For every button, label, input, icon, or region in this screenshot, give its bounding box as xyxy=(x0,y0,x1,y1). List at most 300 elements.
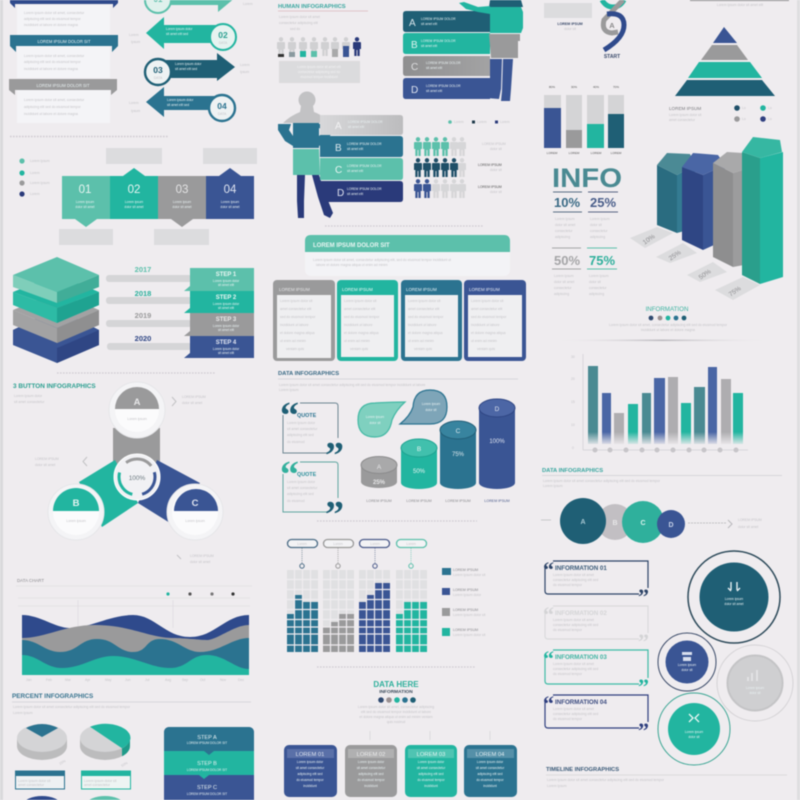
ribbon 1: adipiscing elit sed do eiusmod tempor xyxy=(24,17,82,21)
bar labels: LOREM xyxy=(547,151,558,155)
quote box 1: Lorem ipsum dolor xyxy=(287,421,316,425)
card C xyxy=(320,158,403,180)
axis labels: Mar xyxy=(65,678,72,682)
description xyxy=(358,705,434,724)
quote box 2: do eiusmod xyxy=(287,499,305,503)
chart legend: LOREM IPSUM xyxy=(453,608,478,612)
bar labels: 70% xyxy=(613,85,619,89)
card dark teal: et dolore magna aliqua xyxy=(408,331,443,335)
arrow 03: 03 xyxy=(153,65,163,75)
button captions: LOREM IPSUM xyxy=(190,554,214,558)
speech drop 2: dolor sit xyxy=(425,408,437,412)
heading: DATA INFOGRAPHICS xyxy=(542,468,603,474)
step 4: STEP 4 xyxy=(216,340,237,346)
quote box 2: ” xyxy=(325,494,344,536)
wave layers xyxy=(22,615,249,675)
panel: timeline infographics xyxy=(546,767,787,788)
step 02: 02 xyxy=(128,184,140,196)
card D: LOREM IPSUM DOLOR xyxy=(426,84,461,88)
card D: sit amet elit xyxy=(426,89,442,93)
stat 75%: dolor sit xyxy=(589,280,601,284)
stat 25%: Lorem ipsum xyxy=(590,217,610,221)
step 01 xyxy=(62,176,110,227)
card blue xyxy=(464,280,526,361)
card C: C xyxy=(411,62,418,73)
card blue: et dolore magna aliqua xyxy=(471,331,506,335)
information 03: consectetur adipiscing elit sed xyxy=(553,667,598,671)
ribbon 3: incididunt ut labore et dolore magna xyxy=(24,112,78,116)
circle blue: dolor sit xyxy=(681,668,693,672)
panel: info percentages xyxy=(552,163,622,296)
axis labels: Jul xyxy=(145,678,150,682)
step stack: LOREM IPSUM DOLOR SIT xyxy=(187,792,227,796)
step 02: dolor sit amet xyxy=(124,205,144,209)
axis labels: 15 xyxy=(571,400,575,404)
label box 2 xyxy=(81,771,131,789)
step 04: 04 xyxy=(224,184,237,196)
information 01: Lorem ipsum dolor sit amet xyxy=(553,573,594,577)
panel: data infographics quotes and cylinders xyxy=(278,371,518,536)
circle gray: Lorem ipsum xyxy=(746,686,765,690)
panel: stacked percent bars xyxy=(544,85,624,155)
figure: woman hands on hips xyxy=(278,92,334,218)
arrow 04: 04 xyxy=(217,101,227,111)
axis labels: 0 xyxy=(572,446,574,450)
stat 25%: adipiscing xyxy=(590,235,605,239)
card blue: ut enim ad minim xyxy=(471,339,497,343)
info label xyxy=(609,306,728,332)
information 02: do eiusmod tempor xyxy=(553,628,583,632)
step 01: Lorem ipsum xyxy=(76,200,95,204)
cylinder A: A xyxy=(377,464,382,471)
card gray: amet consectetur elit xyxy=(280,307,311,311)
info label: incididunt ut labore et dolore magna xyxy=(641,328,695,332)
pills: Lorem xyxy=(333,542,343,546)
card gray: veniam quis xyxy=(286,347,304,351)
quote box 2: “ xyxy=(280,454,299,496)
card A: A xyxy=(335,121,342,132)
arrow 02: Lorem ipsum dolor xyxy=(166,27,193,31)
step 4: Lorem ipsum dolor xyxy=(213,347,240,351)
card gray: ut enim ad minim xyxy=(280,339,306,343)
ribbon 1 xyxy=(10,0,118,38)
bar labels xyxy=(547,85,622,155)
stat 75%: 75% xyxy=(589,253,615,268)
card blue: sed do eiusmod tempor xyxy=(471,315,507,319)
heading: Lorem ipsum dolor xyxy=(14,394,43,398)
quote box 1: QUOTE xyxy=(297,413,317,419)
quote box 2: sit amet consectetur xyxy=(287,486,318,490)
button captions: dolor sit amet xyxy=(35,463,55,467)
pills xyxy=(288,540,426,548)
panel: 3d hexagonal bars: 10% xyxy=(642,233,657,246)
arrow 03: sit amet elit sed xyxy=(175,67,197,71)
overlap circles: LOREM IPSUM xyxy=(738,518,762,522)
bar labels: 80% xyxy=(549,85,555,89)
ribbon 2: adipiscing elit sed do eiusmod tempor xyxy=(24,60,82,64)
card teal: incididunt ut labore xyxy=(344,323,373,327)
stat 10%: dolor sit amet xyxy=(555,223,575,227)
step 1: Lorem ipsum dolor xyxy=(213,279,240,283)
ribbon 2: LOREM IPSUM DOLOR SIT xyxy=(37,39,91,44)
step stack: STEP A xyxy=(197,735,217,741)
card 04: Lorem ipsum dolor xyxy=(477,760,504,764)
cylinder B xyxy=(401,439,437,489)
step 4 xyxy=(184,336,254,358)
quote box 2: QUOTE xyxy=(297,472,317,478)
stat 50% xyxy=(552,248,581,296)
information 01: ” xyxy=(638,584,649,609)
bar labels: 40% xyxy=(593,85,599,89)
card A xyxy=(403,11,490,32)
card D xyxy=(320,181,403,202)
floor labels xyxy=(630,227,760,300)
step 02 xyxy=(110,168,158,219)
year labels: 2018 xyxy=(135,289,151,298)
card D: D xyxy=(337,188,344,199)
figure: woman pointing xyxy=(459,0,523,101)
dots xyxy=(378,697,416,703)
panel: human infographics xyxy=(277,0,523,218)
stat 50%: dolor sit amet xyxy=(554,280,574,284)
step 1: STEP 1 xyxy=(216,272,237,278)
label box 2: amet consectetur xyxy=(84,783,111,787)
overlap circles: dolor sit amet xyxy=(738,525,758,529)
button captions xyxy=(35,395,214,564)
overlap circles xyxy=(541,498,762,544)
card teal: et dolore magna aliqua xyxy=(344,331,379,335)
quote box 1: adipiscing elit sed xyxy=(287,433,314,437)
panel: ribbon text cards xyxy=(9,0,118,123)
heading: Lorem ipsum xyxy=(279,388,299,392)
timeline legend: Lorem ipsum xyxy=(30,181,50,185)
card 03 xyxy=(405,745,457,797)
information 04: Lorem ipsum dolor sit amet xyxy=(553,707,594,711)
card 03: LOREM 03 xyxy=(417,752,445,758)
step 4: sit amet elit xyxy=(218,351,234,355)
bar 10 xyxy=(657,153,695,233)
year bars xyxy=(106,275,192,350)
heading: 3 BUTTON INFOGRAPHICS xyxy=(13,383,96,390)
timeline legend xyxy=(19,158,50,197)
axis labels: May xyxy=(105,678,112,682)
arrow 03: DATA xyxy=(154,76,163,80)
bar tracks xyxy=(544,95,624,148)
card dark teal: amet consectetur elit xyxy=(408,307,439,311)
heading xyxy=(278,371,518,392)
information 01 xyxy=(543,557,649,609)
card 03: do eiusmod tempor xyxy=(417,778,446,782)
letter A and start label: START xyxy=(604,54,620,60)
circle teal: Lorem ipsum xyxy=(685,730,704,734)
pyramid legend: Lo xyxy=(768,106,772,110)
card 02: LOREM 02 xyxy=(357,752,385,758)
card C: sit amet elit xyxy=(426,66,442,70)
information 02: consectetur adipiscing elit sed xyxy=(553,623,598,627)
stat 25% xyxy=(588,192,618,239)
panel: 3 button infographics xyxy=(13,382,223,564)
button captions: LOREM IPSUM xyxy=(35,457,59,461)
chart legend: Lorem ipsum dolor sit xyxy=(453,573,485,577)
circle gray xyxy=(717,645,793,721)
step 03: Lorem ipsum xyxy=(173,200,192,204)
card 01: sit amet consectetur xyxy=(296,766,325,770)
pills: Lorem xyxy=(406,542,416,546)
information 03: INFORMATION 03 xyxy=(555,654,607,661)
cylinder C: C xyxy=(456,428,461,435)
card teal: veniam quis xyxy=(350,347,368,351)
gray caption box xyxy=(544,3,592,18)
heading xyxy=(542,468,782,488)
card 04: do eiusmod tempor xyxy=(476,778,505,782)
step stack: LOREM IPSUM DOLOR SIT xyxy=(187,741,227,745)
arrow 03: Ipsum xyxy=(240,70,249,74)
card B: B xyxy=(411,40,418,51)
heading: consectetur adipiscing elit xyxy=(279,21,318,25)
card blue: veniam quis xyxy=(477,347,495,351)
chart legend: Lorem ipsum dolor sit xyxy=(453,613,485,617)
arrow 03: Lorem xyxy=(240,63,250,67)
arrow 02: Ipsum xyxy=(131,40,140,44)
step 3: Lorem ipsum dolor xyxy=(213,324,240,328)
pills: Lorem xyxy=(297,542,307,546)
step 3: sit amet elit xyxy=(218,328,234,332)
pills: Lorem xyxy=(370,542,380,546)
card 04: adipiscing elit sed xyxy=(477,772,503,776)
information 04: do eiusmod tempor xyxy=(553,717,583,721)
cylinder D: 100% xyxy=(489,439,505,445)
timeline legend: Lorem xyxy=(30,171,40,175)
speech drop 1: Lorem ipsum xyxy=(366,415,385,419)
button B: B xyxy=(73,498,80,509)
layer mint xyxy=(13,257,99,303)
panel: pyramid xyxy=(669,0,789,122)
axis labels xyxy=(571,355,575,450)
arrow 02: Lorem xyxy=(129,33,139,37)
cylinder labels: LOREM IPSUM xyxy=(484,499,510,503)
card 04 xyxy=(464,745,517,797)
panel: percent infographics xyxy=(12,693,254,800)
panel: 3d hexagonal bars: 75% xyxy=(728,285,743,298)
label box 1 xyxy=(15,771,65,789)
gray text box: eiusmod tempor incididunt xyxy=(300,75,338,79)
arrow 04 xyxy=(129,87,235,121)
card A: sit amet elit xyxy=(421,22,437,26)
speech drop 2 xyxy=(400,390,447,424)
axis labels: Jan xyxy=(26,678,32,682)
title: DATA HERE xyxy=(373,680,419,689)
panel: data here xyxy=(284,680,517,797)
panel: waffle column chart xyxy=(287,540,485,652)
button A: Lorem ipsum xyxy=(127,417,147,421)
description: quis nostrud xyxy=(387,720,405,724)
speech drop 1 xyxy=(358,402,405,437)
card teal: Lorem ipsum dolor sit xyxy=(344,299,376,303)
caption: LOREM IPSUM xyxy=(557,22,583,26)
panel: timeline infographics: TIMELINE INFOGRAPHICS xyxy=(546,767,619,773)
people pictogram chart: Lorem xyxy=(500,120,510,124)
stat 10%: adipiscing xyxy=(555,235,570,239)
step stack: LOREM IPSUM DOLOR SIT xyxy=(187,768,227,772)
step 3 xyxy=(184,313,254,336)
stat 25%: dolor sit xyxy=(590,223,602,227)
quote box 2: adipiscing elit sed xyxy=(287,492,314,496)
column group 3 xyxy=(359,570,390,652)
chart heading: DATA CHART xyxy=(17,578,44,583)
axis labels: Feb xyxy=(46,678,52,682)
cylinder D: D xyxy=(495,406,500,413)
arrow 03: Lorem ipsum dolor xyxy=(175,62,202,66)
step 3: STEP 3 xyxy=(216,317,237,323)
arrow 04: Lorem ipsum dolor xyxy=(167,98,194,102)
information 04: “ xyxy=(543,691,554,716)
ribbon 2 xyxy=(10,35,118,78)
ribbon 1: incididunt ut labore et dolore magna xyxy=(24,23,78,27)
card dark teal xyxy=(401,280,462,361)
step 04 xyxy=(206,168,254,219)
panel: 3d hexagonal bars: 25% xyxy=(668,249,683,262)
panel: layered cube with years xyxy=(13,257,254,363)
button captions: dolor sit amet xyxy=(182,401,202,405)
axis labels: 10 xyxy=(571,423,575,427)
circle blue xyxy=(658,633,716,691)
panel: lorem ipsum color set: Lorem ipsum dolor sit amet, consectetur adipiscing elit, sed do eiusmod tempor incididunt ut xyxy=(313,258,451,262)
stat 75%: Lorem ipsum xyxy=(589,274,609,278)
panel: data infographics circles xyxy=(541,468,782,544)
card dark teal: Lorem ipsum dolor sit xyxy=(408,299,440,303)
description: Lorem ipsum dolor sit amet, consectetur adipiscing xyxy=(358,705,434,709)
cylinder D xyxy=(479,399,515,489)
cylinder C: 75% xyxy=(452,452,465,458)
pyramid legend: Lo xyxy=(742,106,746,110)
pyramid legend: Lo xyxy=(742,117,746,121)
caption: dolor sit xyxy=(564,27,576,31)
information 04: consectetur adipiscing elit sed xyxy=(553,712,598,716)
cylinder labels: LOREM IPSUM xyxy=(406,499,432,503)
speech drop 2: Lorem ipsum xyxy=(422,402,441,406)
step 1: sit amet elit xyxy=(218,283,234,287)
card D: D xyxy=(411,85,418,96)
pie 1 xyxy=(17,724,67,766)
information 01: consectetur adipiscing elit sed xyxy=(553,578,598,582)
card 04: incididunt xyxy=(483,784,497,788)
year labels: 2017 xyxy=(135,265,151,274)
button captions: LOREM IPSUM xyxy=(182,395,206,399)
card C: sit amet elit xyxy=(347,169,363,173)
ribbon 1: Lorem ipsum dolor sit amet, consectetur xyxy=(24,11,85,15)
title: INFORMATION xyxy=(379,689,413,695)
ribbon 3: LOREM IPSUM DOLOR SIT xyxy=(36,83,90,88)
stat 50%: 50% xyxy=(554,253,580,268)
card A: LOREM IPSUM DOLOR xyxy=(348,120,383,124)
axis labels: Sep xyxy=(182,678,188,682)
card 02: adipiscing elit sed xyxy=(358,772,384,776)
bar 25 xyxy=(682,153,725,250)
step 2 xyxy=(184,291,254,313)
chart legend: Lorem ipsum dolor sit xyxy=(453,633,485,637)
card C xyxy=(403,56,490,76)
card gray xyxy=(273,280,335,361)
heading: Lorem ipsum dolor sit amet consectetur adipiscing elit sed do eiusmod tempor xyxy=(543,479,661,483)
information 03: “ xyxy=(543,646,554,671)
card A xyxy=(320,115,403,135)
card gray: Lorem ipsum dolor sit xyxy=(280,299,312,303)
cylinder B: B xyxy=(417,446,421,453)
circle gray: dolor sit xyxy=(749,691,761,695)
info label: INFORMATION xyxy=(646,306,688,313)
stat 75%: adipiscing xyxy=(589,292,604,296)
ribbon 3: adipiscing elit sed do eiusmod tempor xyxy=(24,105,82,109)
people pictogram chart: Lorem xyxy=(454,120,464,124)
arrow 03 xyxy=(145,53,250,85)
axis labels: Apr xyxy=(85,678,91,682)
card gray: LOREM IPSUM xyxy=(279,287,310,292)
circle large teal xyxy=(688,551,780,643)
gray text box: Lorem ipsum dolor sit amet elit xyxy=(297,65,341,69)
bar fills xyxy=(544,108,624,148)
blue arm xyxy=(138,460,200,523)
heading: HUMAN INFOGRAPHICS xyxy=(278,4,346,10)
circle teal xyxy=(658,693,730,765)
step 2: Lorem ipsum dolor xyxy=(213,302,240,306)
arrow 04: DATA xyxy=(218,112,227,116)
card 01: LOREM 01 xyxy=(296,752,324,758)
ribbon 2: incididunt ut labore et dolore magna xyxy=(24,67,78,71)
information 03: do eiusmod tempor xyxy=(553,672,583,676)
axis labels: Nov xyxy=(220,678,226,682)
card B: B xyxy=(335,143,342,154)
quote box 1: ” xyxy=(325,435,344,477)
timeline legend: Lorem xyxy=(30,192,40,196)
information 02: INFORMATION 02 xyxy=(555,610,607,617)
card gray: incididunt ut labore xyxy=(280,323,309,327)
step 02: Lorem ipsum xyxy=(125,200,144,204)
cylinder A xyxy=(361,456,397,488)
gray text box xyxy=(279,61,360,83)
year labels: 2019 xyxy=(135,311,151,320)
people pictogram chart: LOREM IPSUM xyxy=(482,142,506,146)
teal arm xyxy=(79,460,138,527)
bar 50 xyxy=(713,152,760,267)
timeline legend: Lorem ipsum xyxy=(30,159,50,163)
card 02: Lorem ipsum dolor xyxy=(358,760,385,764)
axis labels: Oct xyxy=(200,678,205,682)
arrow 02: 02 xyxy=(218,30,228,40)
panel: lorem ipsum color set: labore et dolore magna aliqua ut enim ad minim xyxy=(316,263,388,267)
step 1 xyxy=(184,268,254,291)
bar 75 xyxy=(742,137,783,284)
circle teal: dolor sit xyxy=(688,735,700,739)
card blue: LOREM IPSUM xyxy=(469,287,500,292)
circle large teal: dolor sit amet xyxy=(724,602,744,606)
overlap circles: D xyxy=(668,522,674,529)
layer blue xyxy=(13,308,99,363)
people pictogram chart: LOREM IPSUM xyxy=(478,163,502,167)
heading xyxy=(278,4,368,31)
information 04: INFORMATION 04 xyxy=(555,699,607,706)
column group 2 xyxy=(323,570,354,652)
chart legend xyxy=(442,568,485,637)
heading: sed do xyxy=(290,27,300,31)
stat 50%: consectetur xyxy=(554,286,572,290)
card D: sit amet elit xyxy=(347,192,363,196)
pyramid layers xyxy=(675,27,775,96)
people pictogram chart: LOREM IPSUM xyxy=(478,185,502,189)
card C: LOREM IPSUM DOLOR xyxy=(426,61,461,65)
card dark teal: veniam quis xyxy=(414,347,432,351)
card 03: sit amet consectetur xyxy=(417,766,446,770)
bar labels: LOREM xyxy=(591,151,602,155)
